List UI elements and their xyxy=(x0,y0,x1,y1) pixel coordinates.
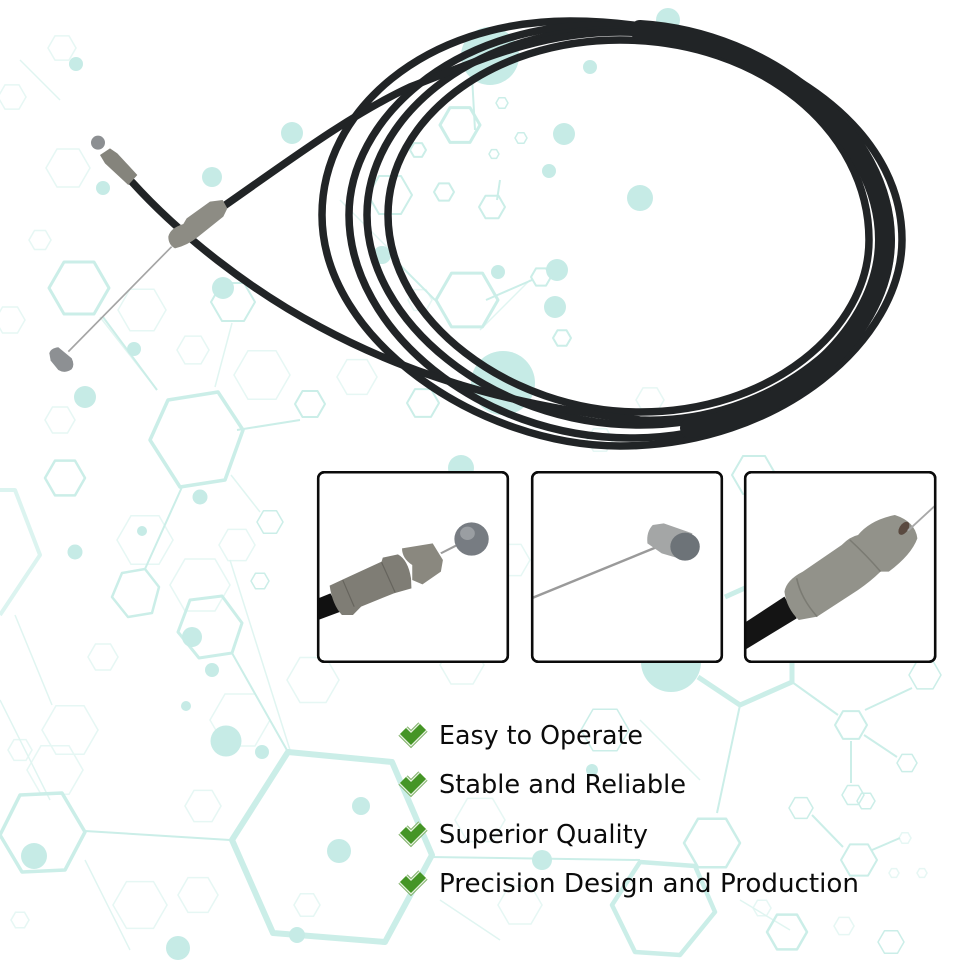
detail panel: barrel end on steel wire xyxy=(532,472,722,662)
detail panel: ball end fitting xyxy=(318,472,508,662)
check icon 4 xyxy=(403,875,423,887)
feature list xyxy=(403,721,859,899)
check icon 1 xyxy=(403,727,423,739)
feature 1: Easy to Operate xyxy=(439,721,643,751)
feature 2: Stable and Reliable xyxy=(439,770,686,800)
main cable: black loops xyxy=(132,21,902,446)
feature 3: Superior Quality xyxy=(439,820,648,850)
check icon 2 xyxy=(403,776,423,788)
check icon 3 xyxy=(403,826,423,838)
cable ball end and inner wire with fittings xyxy=(49,136,227,372)
detail panel: grey sleeve on black cable xyxy=(745,472,936,662)
feature 4: Precision Design and Production xyxy=(439,869,859,899)
